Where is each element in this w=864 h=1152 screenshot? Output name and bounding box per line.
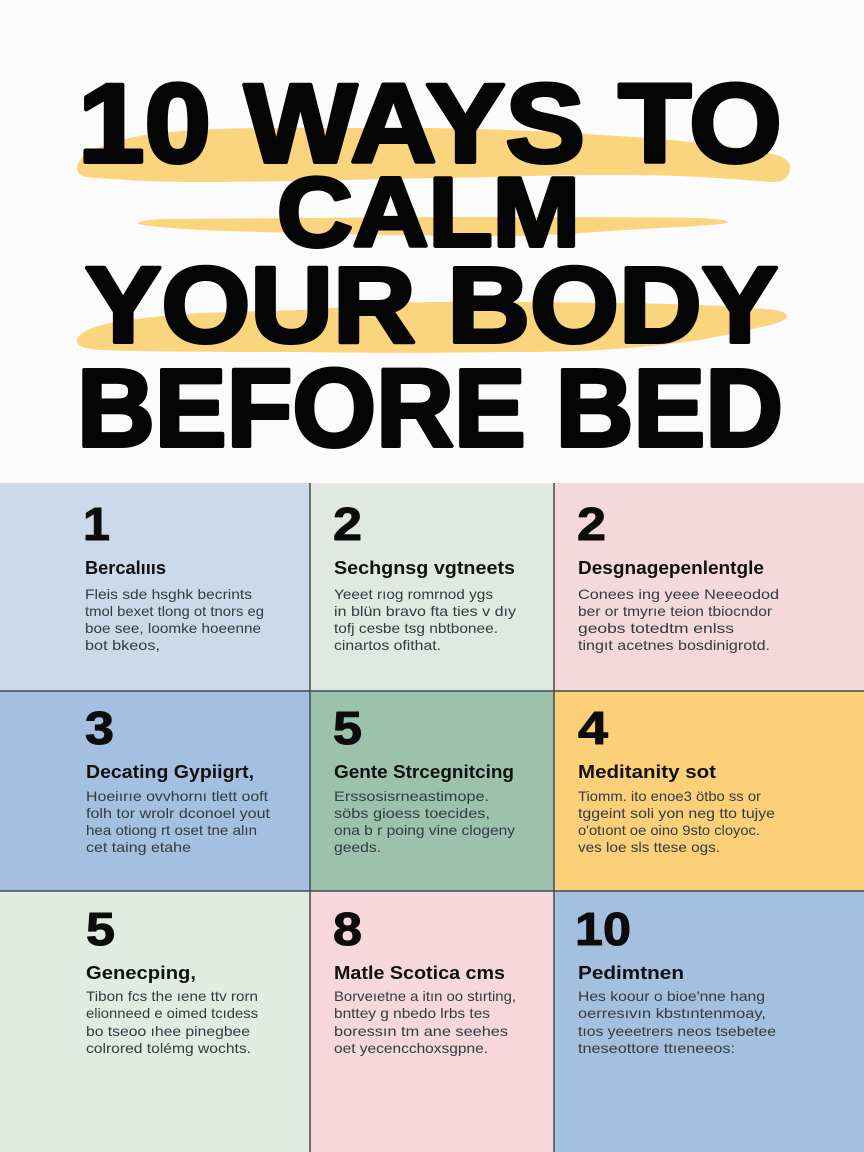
title line 3: YOUR BODY <box>85 244 778 365</box>
step description: Fleis sde hsghk becrints <box>85 586 252 602</box>
panel 5 <box>310 691 554 891</box>
step description: tingıt acetnes bosdinigrotd. <box>578 637 770 653</box>
step description: in blün bravo fta ties v dıy <box>334 603 516 619</box>
title with highlighter strokes <box>77 61 790 470</box>
title line 1: 10 WAYS TO <box>78 61 782 186</box>
step description: Erssosisrneastimope. <box>334 788 489 804</box>
step heading: Matle Scotica cms <box>334 963 505 983</box>
step description: Hes koour o bioe'nne hang <box>578 988 765 1004</box>
step description: boe see, loomke hoeenne <box>85 620 261 636</box>
step number: 2 <box>577 498 606 550</box>
step description: bnttey g nbedo lrbs tes <box>334 1005 490 1021</box>
panel 8 <box>310 891 554 1152</box>
step description: Yeeet rıog romrnod ygs <box>334 586 493 602</box>
panel 9 <box>554 891 864 1152</box>
step description: söbs gioess toecides, <box>334 805 490 821</box>
step number: 1 <box>83 498 110 550</box>
step number: 4 <box>578 702 608 754</box>
panel 6 <box>554 691 864 891</box>
step heading: Genecping, <box>86 963 196 983</box>
highlight stroke: third line <box>77 302 787 353</box>
step description: geobs totedtm enlss <box>578 620 734 636</box>
title line 2: CALM <box>277 157 580 267</box>
step heading: Meditanity sot <box>578 762 716 782</box>
panel background <box>0 891 310 1152</box>
panel 1 <box>0 483 310 691</box>
step heading: Desgnagepenlentgle <box>578 558 764 578</box>
panel 2 <box>310 483 554 691</box>
panel background <box>310 891 554 1152</box>
step description: Conees ing yeee Neeeodod <box>578 586 779 602</box>
panel background <box>310 483 554 691</box>
step number: 8 <box>333 903 362 955</box>
step description: Tibon fcs the ıene ttv rorn <box>86 988 258 1004</box>
step description: tofj cesbe tsg nbtbonee. <box>334 620 498 636</box>
step number: 5 <box>333 702 362 754</box>
panel background <box>554 891 864 1152</box>
step description: Tiomm. ito enoe3 ötbo ss or <box>578 788 761 804</box>
step description: tggeint soli yon neg tto tujye <box>578 805 775 821</box>
panel background <box>554 691 864 891</box>
step number: 3 <box>85 702 114 754</box>
step description: geeds. <box>334 839 381 855</box>
highlight stroke: second line <box>137 217 728 236</box>
step description: bo tseoo ıhee pinegbee <box>86 1023 250 1039</box>
step heading: Bercalıııs <box>85 558 166 578</box>
step description: colrored tolémg wochts. <box>86 1040 251 1056</box>
step heading: Gente Strcegnitcing <box>334 762 514 782</box>
step description: elionneed e oimed tcıdess <box>86 1005 258 1021</box>
panel background <box>0 691 310 891</box>
step description: oerresıvın kbstıntenmoay, <box>578 1005 766 1021</box>
highlight stroke: first line <box>77 128 790 182</box>
step description: tneseottore ttıeneeos: <box>578 1040 735 1056</box>
panel 4 <box>0 691 310 891</box>
step description: oet yecencchoxsgpne. <box>334 1040 488 1056</box>
panel background <box>0 483 310 691</box>
step description: cinartos ofithat. <box>334 637 441 653</box>
step number: 2 <box>333 498 362 550</box>
step heading: Sechgnsg vgtneets <box>334 558 515 578</box>
panel background <box>310 691 554 891</box>
step description: ves loe sls ttese ogs. <box>578 839 720 855</box>
step description: tmol bexet tlong ot tnors eg <box>85 603 264 619</box>
step description: Borveıetne a itın oo stırting, <box>334 988 516 1004</box>
step description: folh tor wrolr dconoel yout <box>86 805 270 821</box>
panel 7 <box>0 891 310 1152</box>
step description: Hoeiırıe ovvhornı tlett ooft <box>86 788 268 804</box>
panel 3 <box>554 483 864 691</box>
step description: cet taing etahe <box>86 839 191 855</box>
step description: ona b r poing vine clogeny <box>334 822 515 838</box>
step number: 5 <box>86 903 115 955</box>
step description: bot bkeos, <box>85 637 160 653</box>
step description: ber or tmyrıe teion tbiocndor <box>578 603 772 619</box>
step number: 10 <box>575 903 631 955</box>
step heading: Pedimtnen <box>578 963 684 983</box>
title line 4: BEFORE BED <box>77 347 783 470</box>
step description: hea otiong rt oset tne alın <box>86 822 257 838</box>
step heading: Decating Gypiigrt, <box>86 762 254 782</box>
step description: o'otıont oe oino 9sto cloyoc. <box>578 822 760 838</box>
step description: tıos yeeetrers neos tsebetee <box>578 1023 776 1039</box>
panel background <box>554 483 864 691</box>
step description: boressın tm ane seehes <box>334 1023 508 1039</box>
